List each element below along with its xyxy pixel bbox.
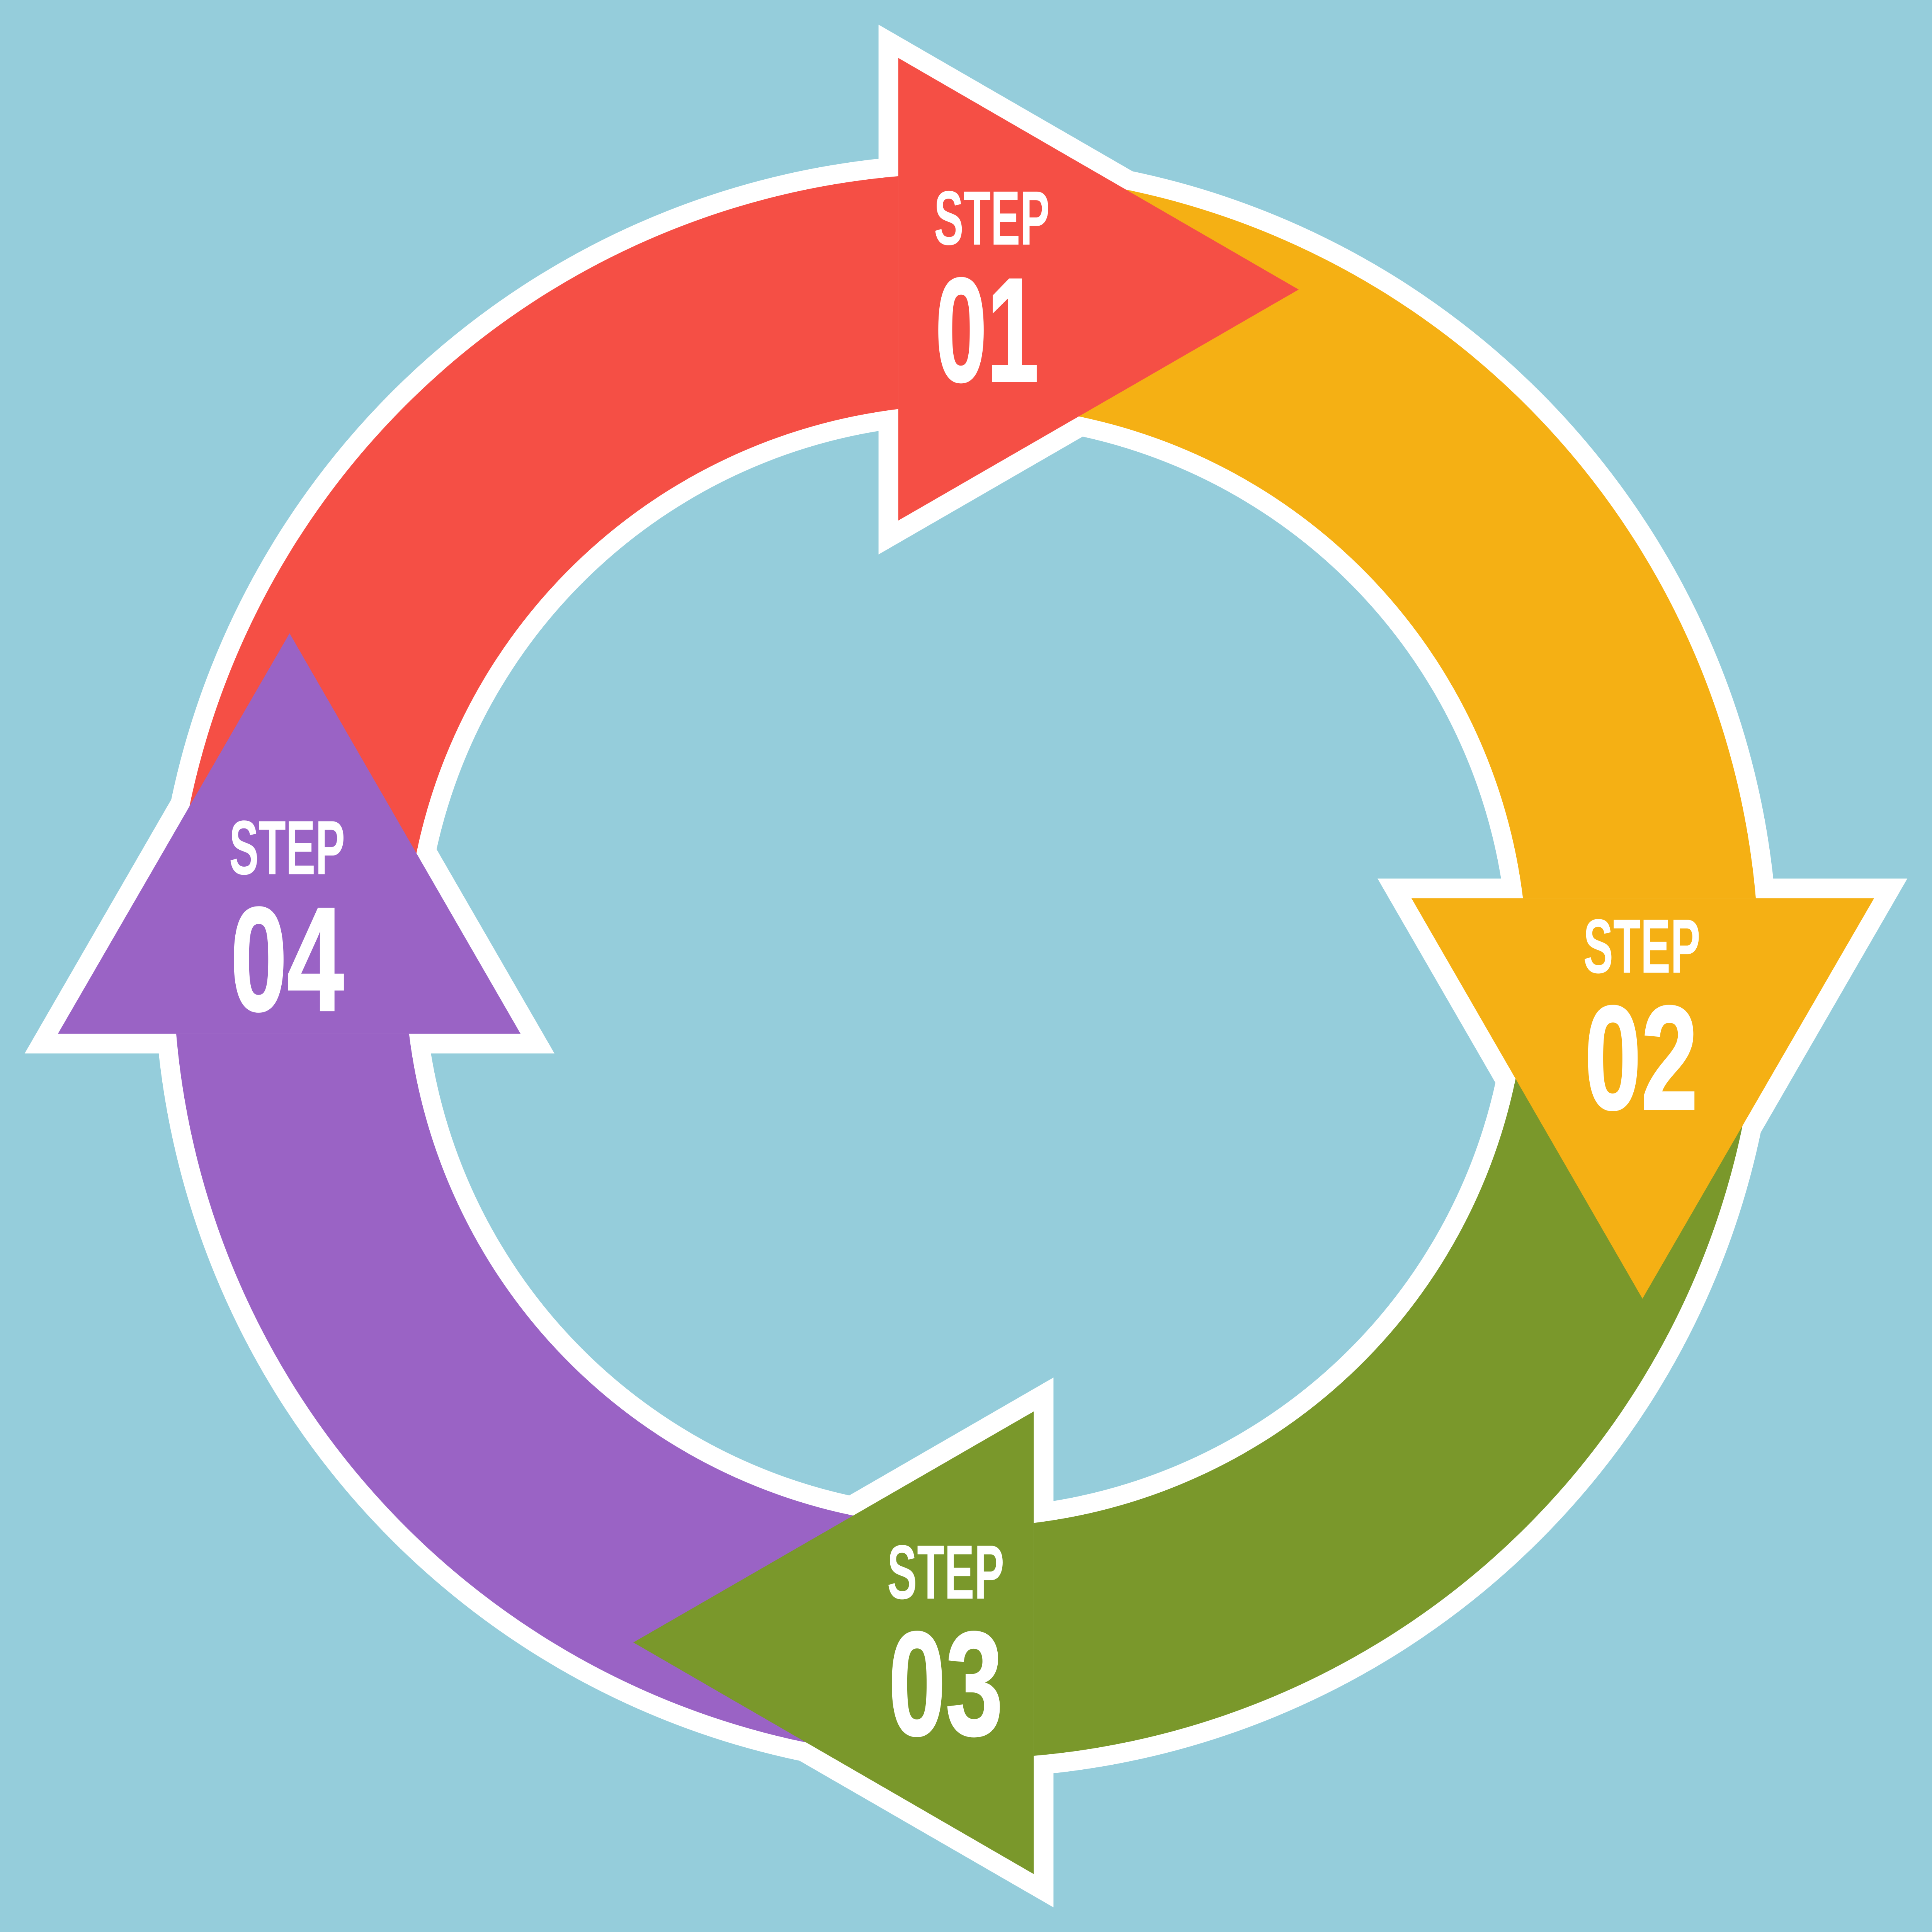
arrow body: step 3 green	[1034, 1070, 1752, 1756]
label: step 02	[1583, 904, 1701, 1141]
arrowhead: step 2 yellow	[1412, 898, 1874, 1299]
label: step 02: 02	[1585, 976, 1698, 1141]
label: step 01: 01	[935, 248, 1039, 413]
label: step 03: STEP	[887, 1529, 1004, 1615]
label: step 01	[934, 175, 1050, 413]
label: step 03: 03	[888, 1602, 1003, 1767]
label: step 01: STEP	[934, 175, 1050, 261]
arrow body: step 1 red	[180, 176, 898, 862]
label: step 04: STEP	[229, 805, 345, 891]
arrow body: step 2 yellow	[1070, 180, 1756, 898]
arrowhead: step 4 purple	[58, 633, 520, 1034]
arrowhead: step 3 green	[633, 1412, 1034, 1874]
label: step 02: STEP	[1583, 904, 1701, 990]
arrowhead: step 1 red	[898, 58, 1299, 520]
label: step 04	[229, 805, 345, 1042]
label: step 03	[887, 1529, 1004, 1767]
label: step 04: 04	[230, 877, 344, 1042]
arrow body: step 4 purple	[176, 1034, 862, 1752]
